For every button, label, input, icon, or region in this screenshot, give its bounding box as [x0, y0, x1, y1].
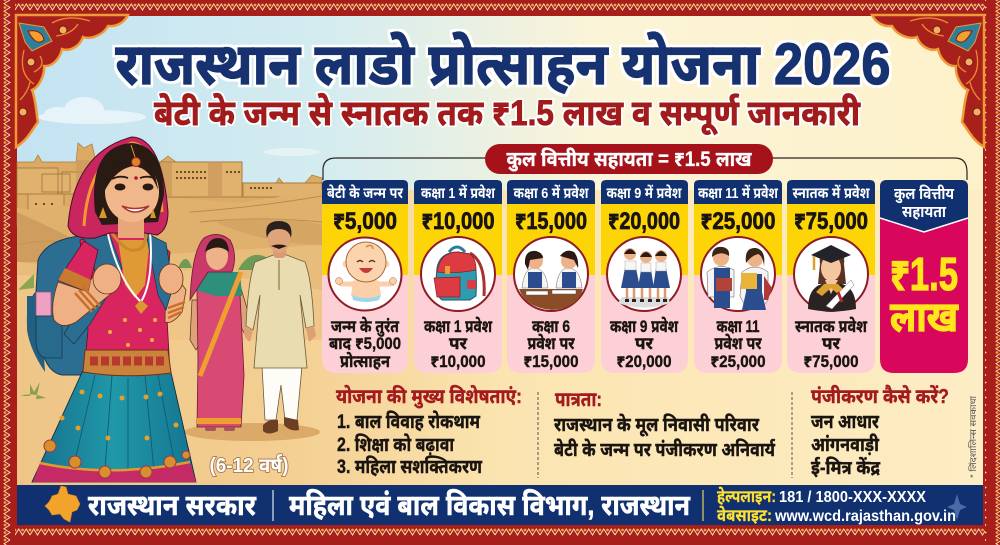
illustration: father in kurta — [244, 221, 316, 434]
blouse — [80, 232, 170, 372]
card: total assistance: लाख — [890, 293, 959, 340]
card: class 9: पर — [635, 334, 654, 353]
skirt — [32, 368, 196, 482]
icon: graduate — [794, 237, 868, 312]
card: birth — [322, 180, 408, 373]
card: class 9: ₹20,000 — [608, 208, 680, 235]
card: birth: बेटी के जन्म पर — [327, 184, 403, 202]
hands — [93, 264, 121, 294]
card: birth: जन्म के तुरंत — [331, 316, 399, 337]
panel: eligibility — [554, 389, 776, 461]
side note: * लिंदशालिन्स सवकाधा — [968, 395, 978, 478]
card: birth: बाद ₹5,000 — [329, 334, 401, 353]
footer bar: महिला एवं बाल विकास विभाग, राजस्थान — [289, 489, 691, 522]
card: class 1 — [414, 180, 502, 373]
icon: students at desk — [514, 237, 588, 311]
panel: key features: 3. महिला सशक्तिकरण — [337, 456, 483, 478]
panel: how to register: पंजीकरण कैसे करें? — [811, 384, 949, 408]
card: graduation: स्नातक में प्रवेश — [792, 184, 870, 202]
card: graduation: ₹75,000 — [794, 208, 868, 235]
card: birth: प्रोत्साहन — [340, 351, 390, 371]
panel: key features: 1. बाल विवाह रोकथाम — [337, 411, 481, 433]
total banner pill: कुल वित्तीय सहायता = ₹1.5 लाख — [506, 147, 752, 172]
card: class 1: ₹10,000 — [430, 352, 486, 371]
connector bracket — [323, 158, 967, 180]
panel: how to register: जन आधार — [811, 412, 880, 433]
subtitle: बेटी के जन्म से स्नातक तक ₹1.5 लाख व सम्पूर्ण जानकारी — [154, 93, 861, 135]
panel: eligibility: राजस्थान के मूल निवासी परिवार — [554, 413, 760, 437]
card: total assistance: ₹1.5 — [890, 248, 958, 300]
icon: three school girls — [607, 237, 681, 311]
card: class 6: ₹15,000 — [524, 352, 578, 371]
card: class 6: कक्षा 6 — [532, 317, 570, 336]
card: graduation: स्नातक प्रवेश — [795, 316, 868, 336]
necklaces — [107, 230, 151, 302]
card: class 11: प्रवेश पर — [714, 333, 762, 353]
backpack — [27, 236, 95, 375]
panel: key features: योजना की मुख्य विशेषताएं: — [336, 384, 522, 409]
icon: teen students — [701, 237, 775, 311]
panel: key features — [336, 384, 522, 478]
card: class 11: ₹25,000 — [710, 352, 766, 371]
footer bar: राजस्थान सरकार — [88, 490, 257, 522]
panel: how to register — [811, 384, 949, 479]
head and face — [94, 143, 164, 225]
total banner pill — [485, 144, 773, 174]
card: class 9 — [601, 180, 688, 373]
footer bar: 181 / 1800-XXX-XXXX — [779, 489, 926, 506]
icon: baby — [328, 238, 402, 310]
card: graduation: पर — [822, 334, 841, 353]
card: class 11 — [694, 180, 782, 373]
card: class 9: कक्षा 9 में प्रवेश — [606, 184, 682, 202]
illustration: Amber fort landscape — [17, 143, 322, 399]
illustration: girl with backpack — [27, 137, 196, 482]
corner ornament: top right — [872, 15, 984, 147]
card: class 11: कक्षा 11 — [716, 317, 760, 336]
footer bar: हेल्पलाइन: — [717, 486, 776, 506]
sleeve and left arm — [53, 268, 118, 326]
footer bar: वेबसाइट: — [717, 505, 772, 525]
title: राजस्थान लाडो प्रोत्साहन योजना 2026 — [116, 32, 890, 97]
card: birth: ₹5,000 — [333, 208, 397, 235]
dupatta — [68, 137, 168, 238]
card: class 1: ₹10,000 — [422, 208, 494, 235]
card: total assistance: सहायता — [902, 204, 946, 221]
icon: sparkle — [947, 494, 967, 520]
card: class 9: कक्षा 9 प्रवेश — [610, 316, 679, 336]
right arm — [165, 262, 186, 323]
card: class 6: ₹15,000 — [515, 208, 587, 235]
panel: eligibility: पात्रता: — [555, 389, 602, 411]
straps — [64, 234, 122, 344]
footer bar — [17, 485, 983, 525]
card: class 6 — [507, 180, 595, 373]
panel: how to register: ई-मित्र केंद्र — [811, 456, 880, 479]
card: graduation — [787, 180, 875, 373]
corner ornament: top left — [16, 15, 128, 147]
icon: backpack — [421, 237, 495, 311]
age label: (6-12 वर्ष) — [210, 454, 288, 477]
panel: how to register: आंगनवाड़ी — [811, 434, 879, 456]
card: graduation: ₹75,000 — [804, 352, 858, 371]
card: class 11: कक्षा 11 में प्रवेश — [698, 184, 778, 202]
card: class 1: कक्षा 1 प्रवेश — [424, 316, 493, 336]
card: class 1: पर — [449, 334, 468, 353]
panel: key features: 2. शिक्षा को बढ़ावा — [337, 434, 454, 456]
illustration: mother in saree — [184, 234, 320, 441]
card: total assistance — [880, 180, 968, 373]
card: class 6: प्रवेश पर — [528, 333, 575, 353]
footer bar: www.wcd.rajasthan.gov.in — [774, 508, 956, 525]
card: total assistance: कुल वित्तीय — [894, 185, 955, 204]
water bottle — [36, 292, 51, 316]
card: class 11: ₹25,000 — [700, 208, 776, 235]
panel: eligibility: बेटी के जन्म पर पंजीकरण अनिवार्य — [554, 438, 776, 461]
card: class 9: ₹20,000 — [616, 352, 672, 371]
icon: Rajasthan emblem — [45, 486, 80, 522]
card: class 1: कक्षा 1 में प्रवेश — [421, 184, 495, 202]
card: class 6: कक्षा 6 में प्रवेश — [514, 184, 589, 202]
